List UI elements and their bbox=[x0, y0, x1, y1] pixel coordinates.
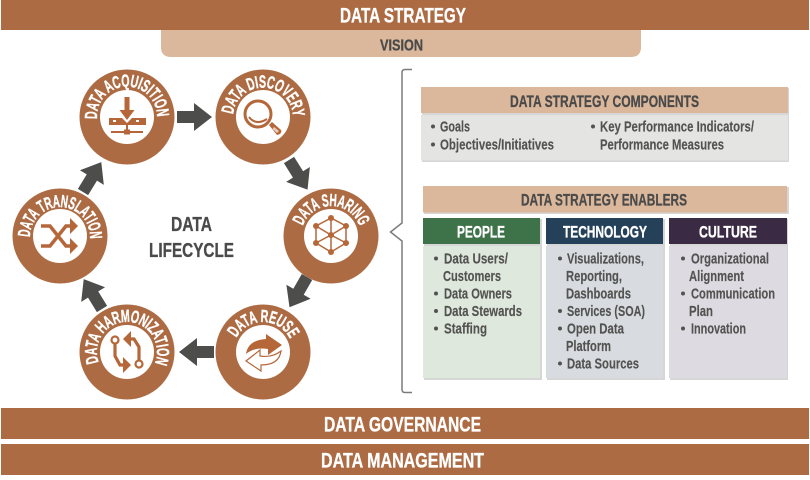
components list: Performance Measures bbox=[600, 136, 724, 154]
icon: network cube bbox=[313, 215, 349, 255]
people list: Data Stewards bbox=[444, 303, 522, 320]
people header: PEOPLE bbox=[457, 222, 505, 242]
panel: culture bbox=[669, 218, 788, 380]
icon: magnifier bbox=[245, 101, 281, 135]
components list: Objectives/Initiatives bbox=[440, 136, 554, 154]
data lifecycle label: LIFECYCLE bbox=[149, 240, 234, 262]
panel: people bbox=[423, 218, 542, 380]
panel: data strategy enablers header: DATA STRATEGY ENABLERS bbox=[521, 190, 687, 210]
data lifecycle label: DATA bbox=[171, 214, 212, 236]
panel: data strategy components bbox=[421, 87, 789, 162]
top bar: data strategy: DATA STRATEGY bbox=[340, 4, 466, 28]
technology list: Services (SOA) bbox=[567, 303, 645, 320]
panel: data strategy enablers header bbox=[423, 186, 789, 214]
culture header bbox=[669, 218, 787, 244]
node: data acquisition: DATA ACQUISITION bbox=[84, 74, 170, 119]
icon: recycle arrows bbox=[246, 334, 282, 371]
technology header: TECHNOLOGY bbox=[563, 222, 647, 242]
bracket bbox=[390, 70, 412, 392]
culture list: Communication bbox=[691, 286, 775, 302]
components header: DATA STRATEGY COMPONENTS bbox=[510, 92, 699, 111]
technology list: Data Sources bbox=[567, 356, 639, 372]
culture list: Innovation bbox=[691, 320, 746, 338]
arrow: acquisition to discovery bbox=[177, 103, 212, 131]
arrow: translation to acquisition bbox=[71, 155, 113, 199]
node: data reuse: DATA REUSE bbox=[226, 310, 300, 339]
panel: technology bbox=[546, 218, 665, 380]
technology list bbox=[546, 246, 663, 378]
icon: pull request arrows bbox=[112, 331, 142, 373]
people list: Data Users/ bbox=[444, 250, 509, 268]
node: data translation bbox=[12, 188, 108, 284]
culture header: CULTURE bbox=[699, 222, 757, 242]
vision banner bbox=[161, 30, 641, 57]
bar: data governance bbox=[1, 408, 809, 439]
node: data harmonization bbox=[80, 304, 174, 400]
node: data harmonization: DATA HARMONIZATION bbox=[84, 310, 170, 366]
node: data discovery bbox=[216, 70, 310, 164]
data lifecycle label bbox=[149, 214, 234, 262]
bar: data management bbox=[1, 444, 809, 475]
arrow: harmonization to translation bbox=[72, 272, 114, 316]
bar: data governance: DATA GOVERNANCE bbox=[324, 414, 481, 436]
technology list: Open Data bbox=[567, 320, 624, 338]
technology list: Reporting, bbox=[566, 268, 622, 285]
people list: Data Owners bbox=[444, 286, 512, 302]
node: data reuse bbox=[216, 304, 310, 400]
node: data translation: DATA TRANSLATION bbox=[18, 194, 102, 238]
technology header bbox=[546, 218, 663, 244]
technology list: Visualizations, bbox=[567, 250, 644, 268]
components list bbox=[421, 115, 788, 160]
icon: download to server bbox=[109, 97, 146, 134]
components list: Key Performance Indicators/ bbox=[600, 118, 755, 136]
vision banner: VISION bbox=[380, 38, 423, 54]
people header bbox=[423, 218, 540, 244]
culture list: Organizational bbox=[691, 250, 769, 268]
technology list: Dashboards bbox=[566, 286, 631, 302]
node: data sharing bbox=[284, 188, 378, 284]
top bar: data strategy bbox=[1, 0, 809, 30]
node: data acquisition bbox=[80, 70, 174, 164]
culture list: Alignment bbox=[689, 268, 744, 285]
arrow: reuse to harmonization bbox=[179, 338, 214, 366]
technology list: Platform bbox=[566, 338, 611, 355]
node: data discovery: DATA DISCOVERY bbox=[221, 75, 306, 116]
components header bbox=[421, 87, 788, 113]
arrow: sharing to reuse bbox=[277, 270, 319, 314]
components list: Goals bbox=[440, 118, 470, 136]
icon: shuffle arrows bbox=[41, 218, 78, 254]
culture list bbox=[669, 246, 787, 378]
culture list: Plan bbox=[689, 303, 713, 320]
node: data sharing: DATA SHARING bbox=[292, 194, 370, 226]
people list: Customers bbox=[443, 268, 501, 285]
people list: Staffing bbox=[444, 320, 487, 338]
people list bbox=[423, 246, 540, 378]
arrow: discovery to sharing bbox=[277, 153, 319, 197]
bar: data management: DATA MANAGEMENT bbox=[321, 450, 484, 472]
